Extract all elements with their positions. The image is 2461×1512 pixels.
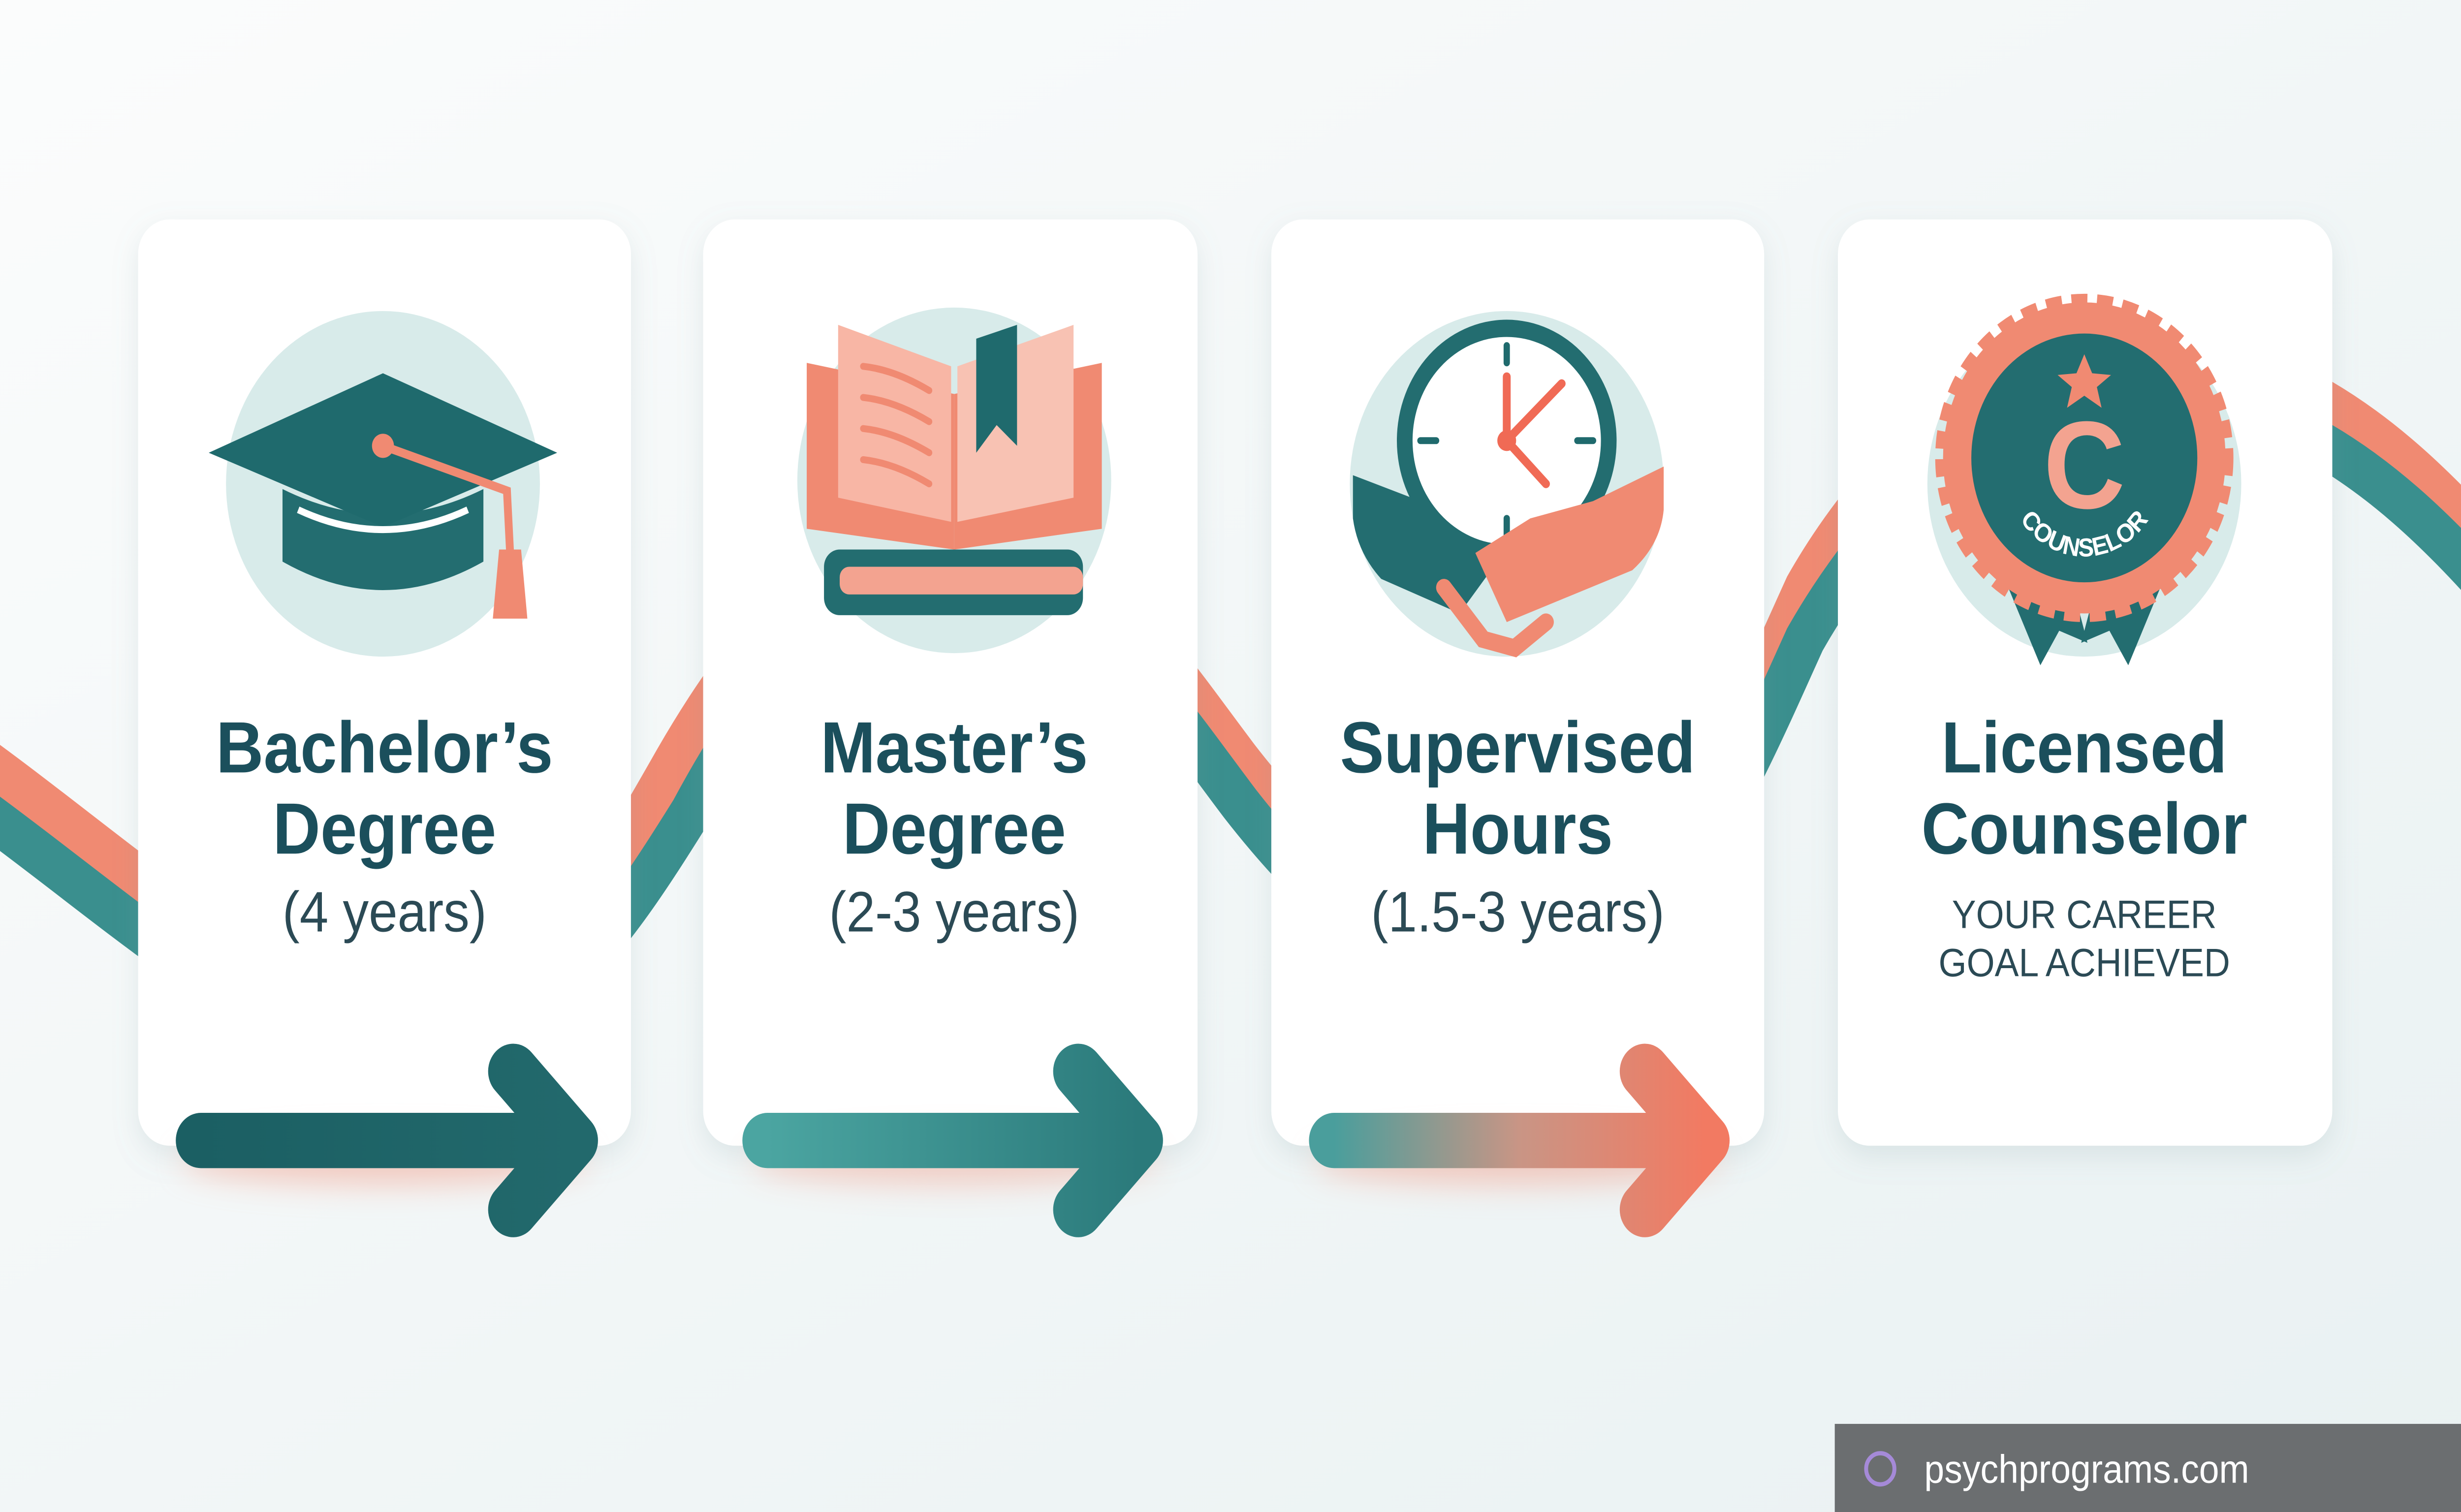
background wave ribbon	[0, 346, 2461, 1045]
icon: graduation cap	[209, 311, 557, 657]
card 2: Master's Degree	[703, 220, 1198, 1146]
title: Master's Degree: Master’s	[820, 706, 1088, 788]
arrow 3	[1314, 1071, 1722, 1210]
watermark: psychprograms.com	[1924, 1447, 2249, 1491]
card 4: Licensed Counselor: GOAL ACHIEVED	[1939, 941, 2230, 985]
card 4: Licensed Counselor	[1834, 220, 2336, 1160]
icon: open book	[797, 308, 1111, 653]
icon: counselor badge: COUNSELOR	[2023, 511, 2149, 557]
watermark	[1835, 1424, 2461, 1512]
icon: counselor badge	[1927, 293, 2241, 665]
icon: clock and handshake	[1350, 311, 1664, 657]
subtitle: (2-3 years)	[829, 881, 1079, 944]
subtitle: (1.5-3 years)	[1371, 881, 1665, 944]
title: Bachelor's Degree: Bachelor’s	[216, 706, 553, 788]
arrow 1	[181, 1071, 589, 1210]
title: Supervised Hours: Supervised	[1340, 706, 1696, 788]
card 3: Supervised Hours	[1271, 220, 1764, 1146]
card 3: Supervised Hours: Hours	[1422, 788, 1613, 869]
card 1: Bachelor's Degree	[138, 220, 631, 1146]
card 4: Licensed Counselor: Counselor	[1922, 788, 2247, 869]
subtitle: (4 years)	[283, 881, 487, 944]
icon: counselor badge: C	[2044, 396, 2125, 535]
card 2: Master's Degree: Degree	[843, 788, 1066, 869]
arrow 2	[750, 1071, 1158, 1210]
card 1: Bachelor's Degree: Degree	[273, 788, 496, 869]
subtitle: career goal: YOUR CAREER	[1952, 892, 2217, 937]
title: Licensed Counselor: Licensed	[1941, 706, 2227, 788]
